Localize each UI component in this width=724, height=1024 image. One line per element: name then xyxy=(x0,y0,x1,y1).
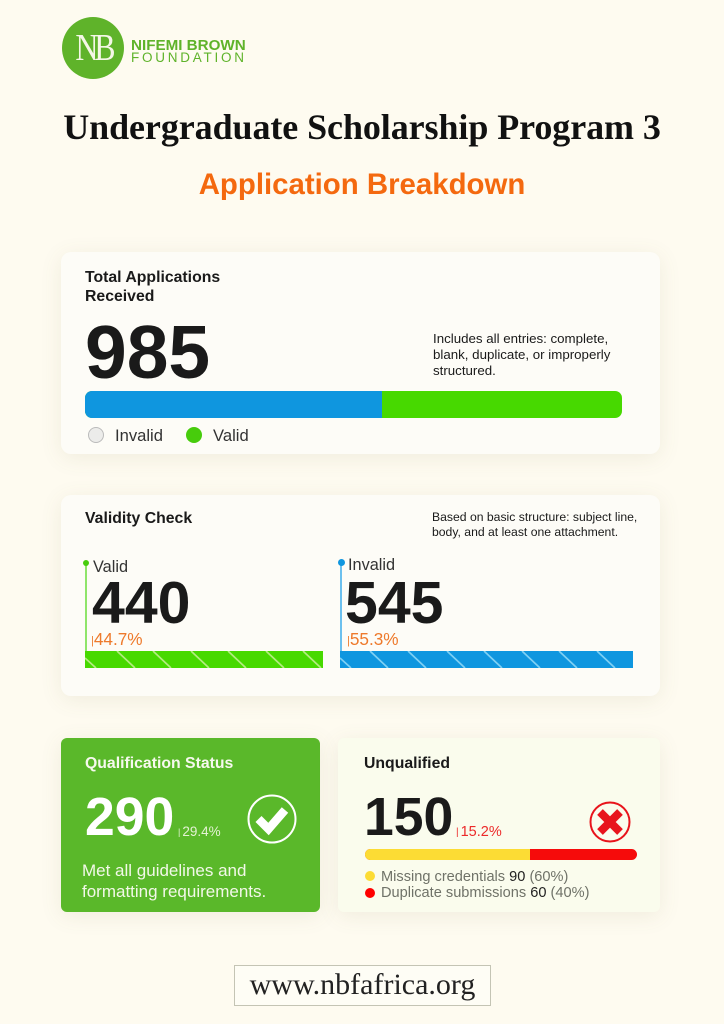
hatched bar xyxy=(85,651,323,668)
subtitle: Application Breakdown xyxy=(199,168,525,201)
label: Invalid xyxy=(348,556,395,574)
heading: Validity Check xyxy=(85,510,192,527)
percentage: |15.2% xyxy=(456,824,502,840)
number: 150 xyxy=(364,788,453,847)
description: Based on basic structure: subject line, xyxy=(432,510,637,524)
logo wordmark top: NIFEMI BROWN xyxy=(131,37,246,54)
legend xyxy=(88,426,249,445)
big number: 985 xyxy=(85,310,210,394)
legend text: duplicate: Duplicate submissions 60 (40%) xyxy=(381,885,589,901)
icon: check mark xyxy=(248,794,296,844)
description: Includes all entries: complete, xyxy=(433,331,608,346)
legend dot: missing xyxy=(365,871,375,881)
logo: Nifemi Brown Foundation xyxy=(62,17,247,79)
heading xyxy=(85,269,220,305)
description: formatting requirements. xyxy=(82,882,266,901)
heading: Total Applications xyxy=(85,269,220,286)
legend text: missing: Missing credentials 90 (60%) xyxy=(381,869,568,885)
legend xyxy=(365,869,589,901)
percentage: |44.7% xyxy=(91,629,143,649)
description: blank, duplicate, or improperly xyxy=(433,347,610,362)
title: Undergraduate Scholarship Program 3 xyxy=(63,107,661,147)
panel: unqualified xyxy=(338,738,660,912)
description xyxy=(432,510,637,539)
marker dot xyxy=(338,559,345,566)
hatched bar xyxy=(340,651,633,668)
footer: website: www.nbfafrica.org xyxy=(250,968,475,1001)
description: structured. xyxy=(433,363,496,378)
panel: validity check xyxy=(61,495,660,696)
heading: Received xyxy=(85,288,154,305)
stacked bar xyxy=(365,849,637,860)
description: body, and at least one attachment. xyxy=(432,525,618,539)
legend dot: duplicate xyxy=(365,888,375,898)
marker line xyxy=(85,563,86,668)
description xyxy=(82,861,266,901)
legend dot: invalid xyxy=(88,427,104,443)
marker dot xyxy=(82,560,88,566)
logo mark: NB circle xyxy=(62,17,124,79)
invalid block xyxy=(338,556,633,668)
heading: Qualification Status xyxy=(85,755,233,772)
percentage: |55.3% xyxy=(347,629,399,649)
number: 545 xyxy=(345,570,443,636)
percentage: |29.4% xyxy=(178,824,221,839)
label: Valid xyxy=(93,558,128,576)
logo mark: NB circle: NB xyxy=(75,27,111,69)
invalid segment xyxy=(85,391,382,418)
description: Met all guidelines and xyxy=(82,861,246,880)
marker line xyxy=(340,561,342,668)
valid block xyxy=(83,558,323,668)
number: 440 xyxy=(92,570,190,636)
panel: total applications xyxy=(61,252,660,454)
legend dot: valid xyxy=(186,427,202,443)
panel: qualification status xyxy=(61,738,320,912)
logo wordmark bottom: FOUNDATION xyxy=(131,50,247,65)
icon: cross xyxy=(590,802,630,842)
number: 290 xyxy=(85,788,174,847)
heading: Unqualified xyxy=(364,755,450,772)
legend label: invalid: Invalid xyxy=(115,426,163,445)
description xyxy=(433,331,610,378)
legend label: valid: Valid xyxy=(213,426,249,445)
stacked bar xyxy=(85,391,622,418)
missing credentials segment xyxy=(365,849,530,860)
